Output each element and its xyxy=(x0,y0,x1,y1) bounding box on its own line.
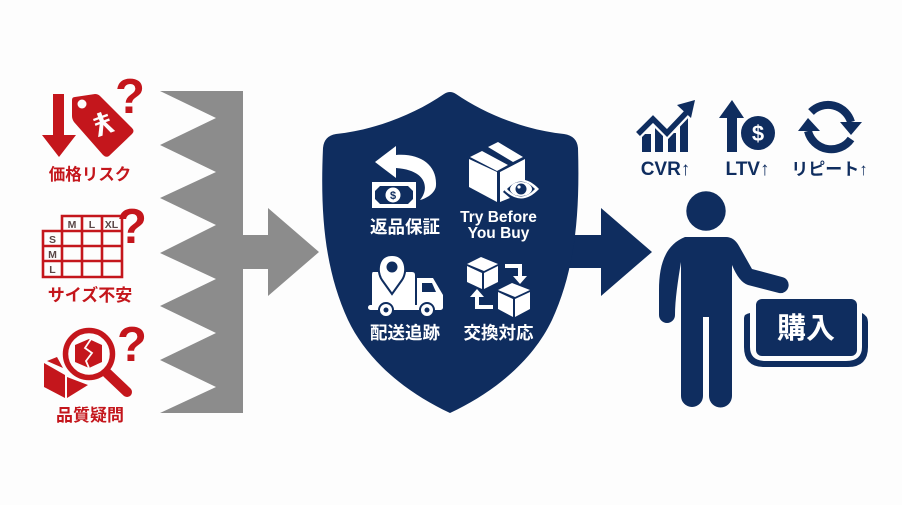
panel: purchase risks xyxy=(42,70,147,425)
icon: quality doubt: ? xyxy=(117,318,147,372)
navy arrow xyxy=(560,208,652,296)
icon: price risk xyxy=(42,70,145,157)
label: size anxiety: サイズ不安 xyxy=(48,285,132,305)
icon: size anxiety: ? xyxy=(117,200,147,254)
icon: LTV up arrow and coin xyxy=(719,100,778,152)
icon: size anxiety: L xyxy=(89,219,96,231)
label: price risk: 価格リスク xyxy=(49,165,131,184)
panel: outcomes xyxy=(638,100,868,408)
label: quality doubt: 品質疑問 xyxy=(56,406,124,425)
barrier wall with arrow xyxy=(160,91,319,413)
label: CVR: CVR↑ xyxy=(641,159,690,180)
button: purchase xyxy=(744,299,868,367)
icon: size anxiety xyxy=(43,200,147,277)
icon: size anxiety: XL xyxy=(105,219,119,231)
icon: money back xyxy=(372,146,436,208)
icon: size anxiety: M xyxy=(48,249,57,261)
icon: repeat cycle xyxy=(798,105,862,149)
icon: size anxiety: S xyxy=(49,234,56,246)
label: delivery tracking: 配送追跡 xyxy=(370,323,440,343)
icon: price risk: ? xyxy=(115,70,145,124)
label: money back guarantee: 返品保証 xyxy=(370,217,440,237)
label: LTV: LTV↑ xyxy=(726,159,769,180)
icon: money back: $ xyxy=(390,190,396,202)
label: try before you buy: Try Before xyxy=(460,209,537,226)
panel: guarantee shield xyxy=(322,92,578,413)
icon: LTV up arrow and coin: $ xyxy=(752,121,764,146)
icon: CVR growth chart xyxy=(638,100,695,152)
icon: exchange xyxy=(467,257,530,317)
icon: delivery tracking xyxy=(368,255,443,317)
icon: size anxiety: L xyxy=(49,264,56,276)
label: repeat: リピート↑ xyxy=(791,160,868,179)
icon: size anxiety: M xyxy=(68,219,77,231)
label: try before you buy: You Buy xyxy=(468,225,530,242)
label: try before you buy xyxy=(460,209,537,242)
icon: box and eye xyxy=(469,142,539,202)
icon: person xyxy=(659,191,789,408)
icon: price risk: ¥ xyxy=(87,103,118,144)
button: purchase: 購入 xyxy=(777,312,835,345)
icon: quality doubt xyxy=(44,318,147,398)
label: exchange support: 交換対応 xyxy=(464,323,534,343)
